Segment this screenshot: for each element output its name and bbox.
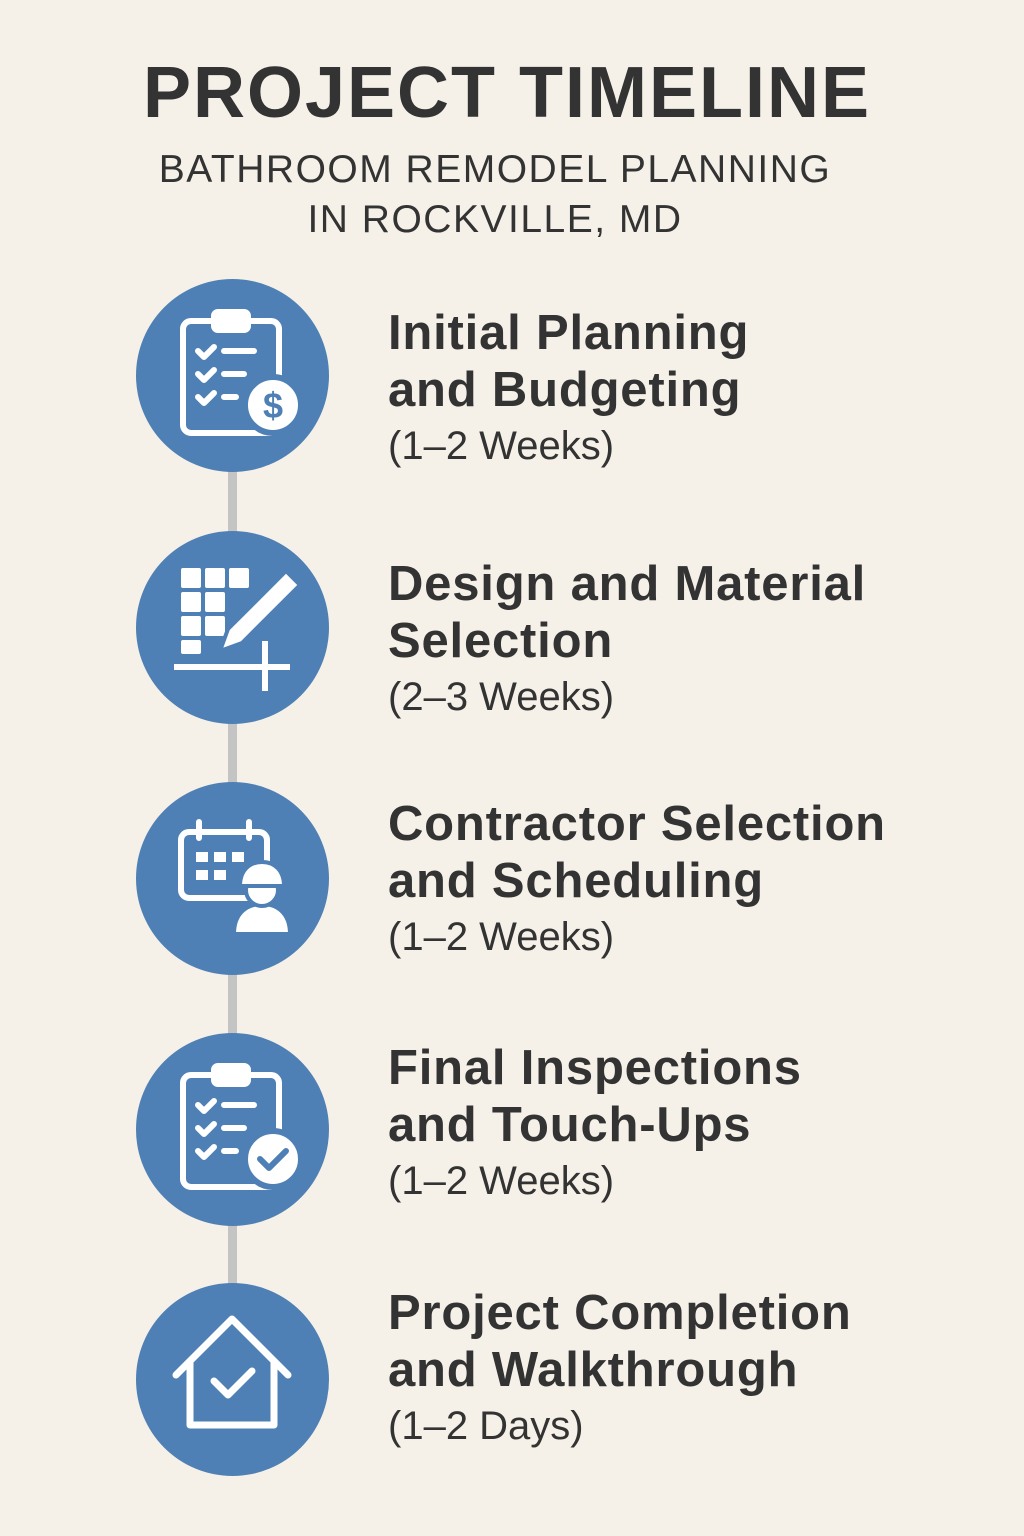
icon: calendar and worker: [136, 782, 329, 975]
step 5 text: (1–2 Days): [388, 1404, 584, 1448]
icon: clipboard with check: [136, 1033, 329, 1226]
step 4 text: Final Inspections: [388, 1041, 802, 1095]
step 5 text: and Walkthrough: [388, 1343, 798, 1397]
step 5 text: [388, 1286, 852, 1448]
icon: clipboard with dollar: $: [263, 385, 283, 426]
icon: tiles and pencil: [136, 531, 329, 724]
step 2 text: (2–3 Weeks): [388, 675, 614, 719]
icon: clipboard with dollar: [136, 279, 329, 472]
step 3 text: (1–2 Weeks): [388, 915, 614, 959]
step 1 text: and Budgeting: [388, 363, 741, 417]
subtitle: IN ROCKVILLE, MD: [307, 198, 683, 241]
step 3 text: [388, 797, 886, 959]
icon: house with check: [136, 1283, 329, 1476]
step 4 text: [388, 1041, 802, 1203]
step 3 text: Contractor Selection: [388, 797, 886, 851]
step 5 text: Project Completion: [388, 1286, 852, 1340]
title: PROJECT TIMELINE: [143, 53, 871, 133]
step 3 text: and Scheduling: [388, 854, 764, 908]
step 4 text: and Touch-Ups: [388, 1098, 751, 1152]
step 4 text: (1–2 Weeks): [388, 1159, 614, 1203]
step 2 text: [388, 557, 866, 719]
timeline connector: [228, 400, 237, 1360]
subtitle: BATHROOM REMODEL PLANNING: [159, 148, 831, 191]
step 2 text: Design and Material: [388, 557, 866, 611]
subtitle: [159, 148, 831, 241]
step 1 text: Initial Planning: [388, 306, 749, 360]
step 1 text: [388, 306, 749, 468]
step 2 text: Selection: [388, 614, 613, 668]
step 1 text: (1–2 Weeks): [388, 424, 614, 468]
